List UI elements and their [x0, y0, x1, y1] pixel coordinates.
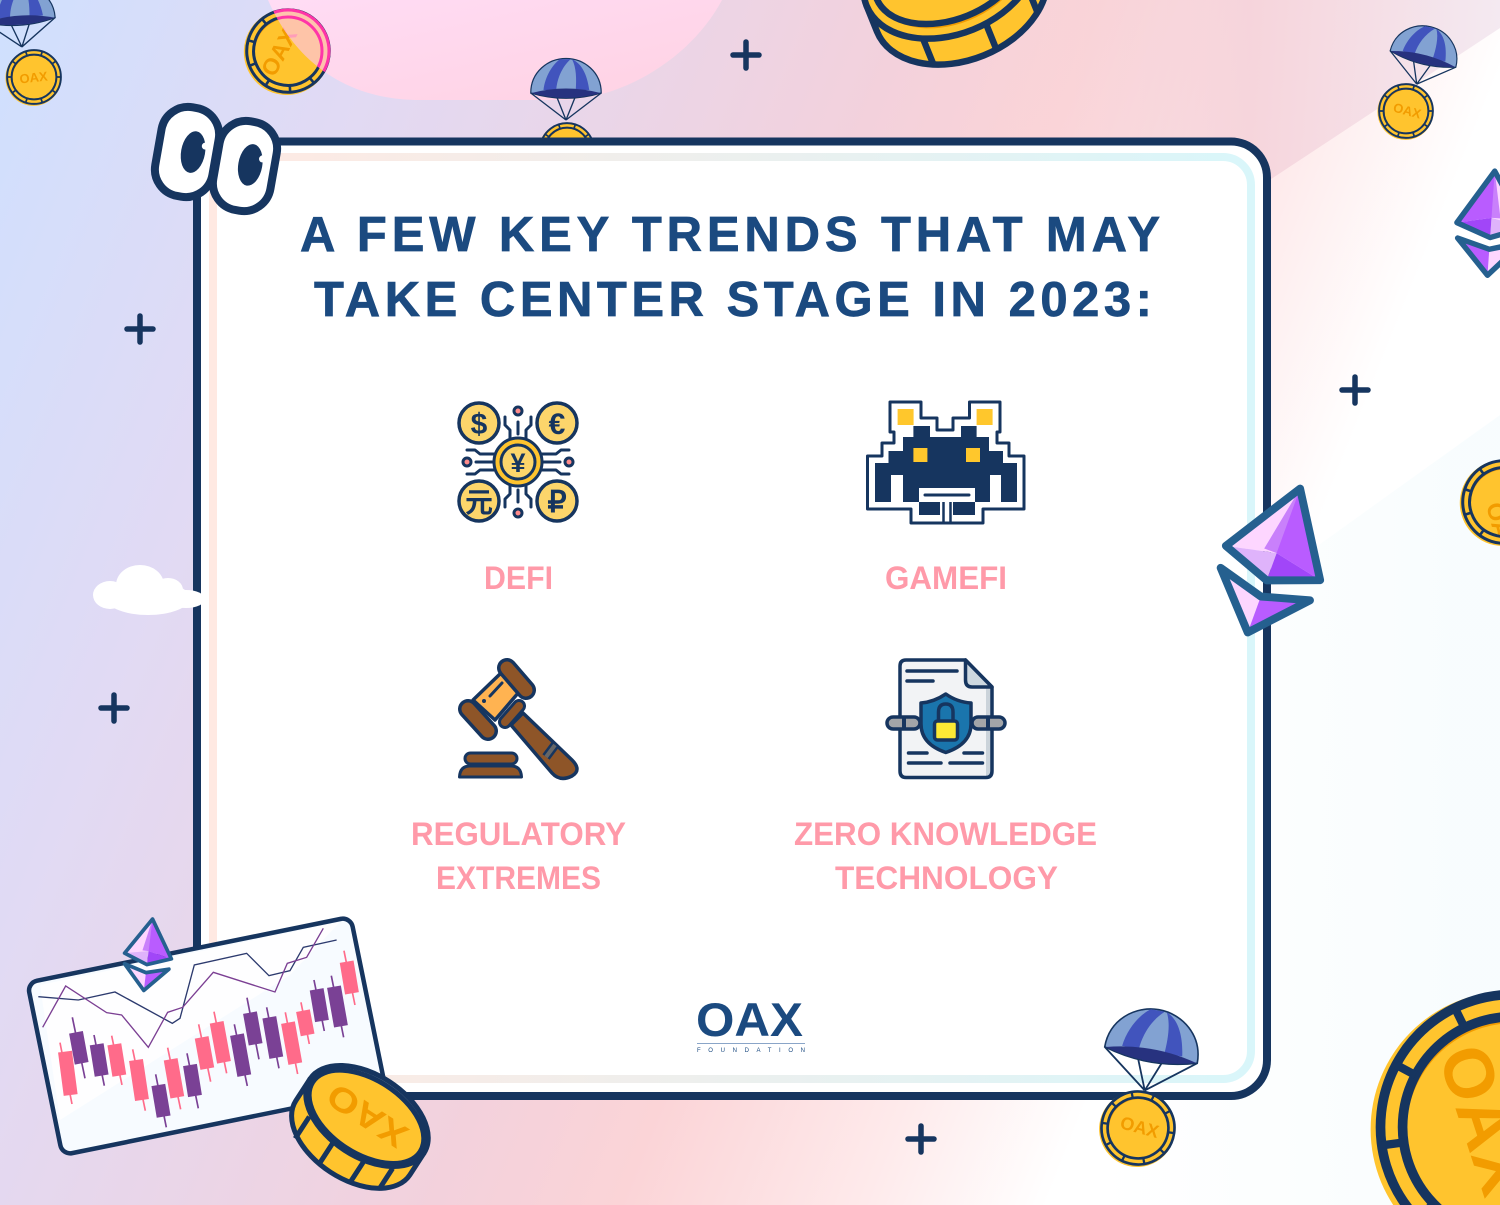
label: regulatory extremes: REGULATORY — [411, 816, 626, 852]
parachute coin top left — [0, 0, 61, 106]
label: defi: DEFI — [484, 560, 553, 596]
parachute coin bottom right — [1094, 1002, 1205, 1172]
icon: defi coins and circuits — [459, 403, 577, 521]
parachute coin top right — [1377, 19, 1464, 140]
parachute coin bottom right: OAX — [1118, 1112, 1161, 1142]
icon: defi coins and circuits: 元 — [465, 487, 493, 518]
OAX foundation logo: FOUNDATION — [697, 1048, 805, 1054]
label: regulatory extremes — [411, 816, 626, 896]
plus sign left upper — [127, 316, 153, 342]
ethereum diamond on chart — [120, 916, 176, 993]
icon: locked document — [887, 660, 1005, 778]
coin top with pink overlay: OAX — [256, 24, 302, 80]
big eth diamond on panel edge — [1201, 471, 1347, 650]
pink candles — [60, 951, 355, 1111]
title — [300, 208, 1160, 327]
plus sign left lower — [101, 695, 127, 721]
purple candles — [72, 976, 344, 1127]
large coin bottom left: OAX — [320, 1075, 415, 1155]
label: zero knowledge technology — [794, 816, 1097, 896]
main white panel — [197, 142, 1267, 1096]
icon: defi coins and circuits: € — [549, 408, 566, 441]
large coin top centre — [843, 0, 1067, 89]
cloud — [93, 565, 205, 615]
plus sign right — [1342, 377, 1368, 403]
coin top with pink overlay — [244, 8, 331, 95]
label: zero knowledge technology: ZERO KNOWLEDGE — [794, 816, 1097, 852]
OAX foundation logo: OAX — [696, 993, 803, 1046]
icon: defi coins and circuits: ₽ — [547, 486, 567, 519]
title: A FEW KEY TRENDS THAT MAY — [300, 208, 1160, 262]
icon: defi coins and circuits: $ — [471, 408, 488, 441]
plus sign top — [733, 42, 759, 68]
label: zero knowledge technology: TECHNOLOGY — [835, 860, 1058, 896]
coin right edge — [1460, 459, 1500, 546]
large coin bottom right — [1322, 943, 1500, 1205]
candlestick chart card — [27, 917, 386, 1155]
label: gamefi: GAMEFI — [885, 560, 1007, 596]
icon: gavel — [460, 668, 577, 778]
pink blob — [268, 0, 722, 100]
ethereum diamond right edge — [1453, 169, 1500, 278]
label: regulatory extremes: EXTREMES — [436, 860, 601, 896]
parachute coin top centre — [531, 58, 601, 179]
parachute coin top right: OAX — [1392, 100, 1423, 122]
icon: pixel space invader — [868, 402, 1024, 523]
plus sign bottom — [908, 1126, 934, 1152]
title: TAKE CENTER STAGE IN 2023: — [314, 273, 1152, 327]
icon: defi coins and circuits: ¥ — [510, 448, 526, 478]
cartoon eyes — [151, 103, 281, 215]
coin top with pink overlay: OAX — [256, 24, 302, 80]
parachute coin top left: OAX — [19, 69, 49, 86]
large coin bottom left — [273, 1045, 446, 1205]
